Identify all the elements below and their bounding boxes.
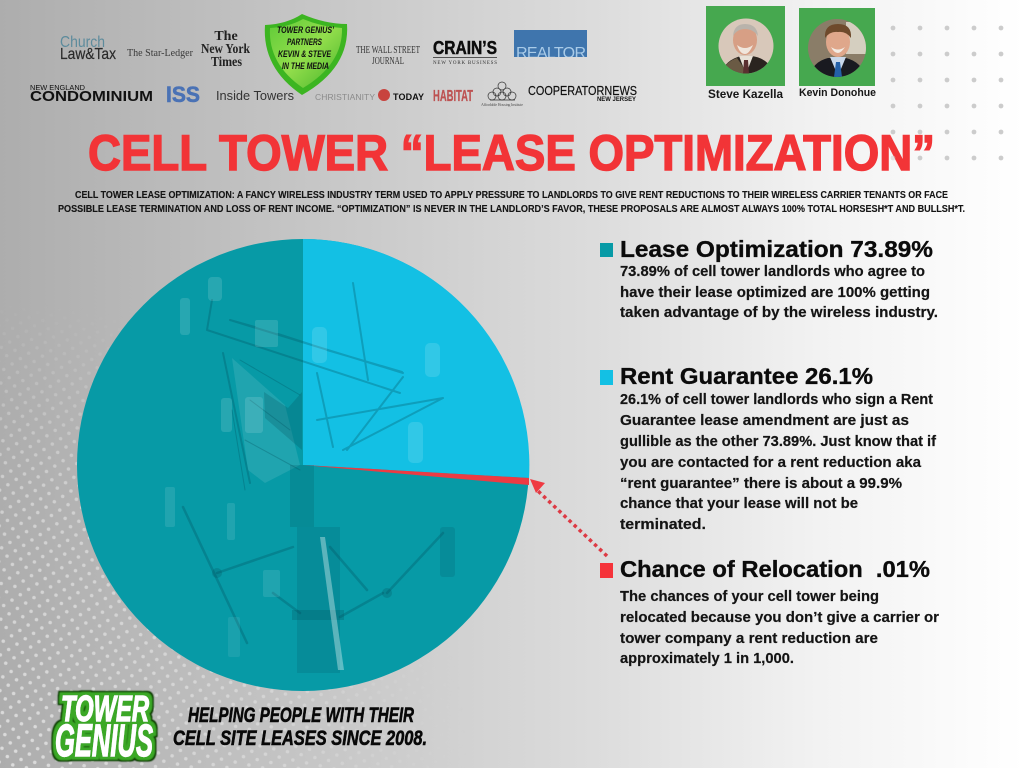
text block: rent guarantee description: you are contacted for a rent reduction aka bbox=[620, 455, 922, 471]
logo: New England Condominium: CONDOMINIUM bbox=[30, 88, 153, 105]
text block: chance of relocation description: relocated because you don’t give a carrier or bbox=[620, 610, 939, 626]
logo: Realtor bbox=[514, 30, 587, 57]
logo: The New York Times: Times bbox=[211, 55, 242, 70]
logo: Crain's bbox=[433, 38, 497, 66]
text block: lease optimization description bbox=[620, 264, 938, 321]
logo: Christianity Today bbox=[315, 89, 424, 102]
text block: chance of relocation description bbox=[620, 589, 939, 667]
logo: Habitat: HABITAT bbox=[433, 88, 473, 105]
heading: chance of relocation: Chance of Relocation .01% bbox=[620, 556, 930, 582]
logo: The Wall Street Journal: THE WALL STREET bbox=[356, 44, 420, 56]
portrait: Steve Kazella bbox=[706, 6, 785, 86]
logo: New England Condominium bbox=[30, 83, 153, 105]
panel: media logos bbox=[30, 29, 637, 107]
logo: Tower Genius bbox=[55, 688, 153, 766]
logo: Crain's: NEW YORK BUSINESS bbox=[433, 61, 497, 66]
logo: The New York Times: The bbox=[214, 29, 238, 44]
icon: media shield bbox=[265, 14, 347, 95]
logo: The Wall Street Journal: JOURNAL bbox=[372, 55, 404, 67]
legend item: chance of relocation bbox=[600, 556, 939, 667]
pie chart: lease outcomes bbox=[77, 239, 529, 691]
tagline: CELL SITE LEASES SINCE 2008. bbox=[173, 727, 427, 750]
logo: Christianity Today: TODAY bbox=[393, 92, 424, 102]
text block: rent guarantee description: “rent guarantee” there is about a 99.9% bbox=[620, 476, 902, 492]
text block: rent guarantee description: gullible as the other 73.89%. Just know that if bbox=[620, 434, 936, 450]
logo: The New York Times bbox=[201, 29, 250, 70]
legend swatch: teal bbox=[600, 243, 613, 257]
logo: The Wall Street Journal bbox=[356, 44, 420, 67]
legend swatch: red bbox=[600, 563, 613, 578]
text block: rent guarantee description: chance that your lease will not be bbox=[620, 496, 858, 512]
text block: rent guarantee description: terminated. bbox=[620, 517, 706, 533]
tagline bbox=[173, 704, 427, 750]
logo: Tower Genius: TOWER bbox=[61, 688, 149, 729]
text block: lease optimization description: taken advantage of by the wireless industry. bbox=[620, 305, 938, 321]
logo: ISS: ISS bbox=[166, 82, 200, 107]
logo: Cooperator News New Jersey bbox=[528, 84, 637, 103]
logo: Christianity Today: CHRISTIANITY bbox=[315, 92, 375, 102]
pie slice: rent guarantee 26.1% bbox=[303, 239, 529, 478]
logo: Cooperator News New Jersey: NEW JERSEY bbox=[597, 96, 637, 103]
text block: lease optimization description: have their lease optimized are 100% getting bbox=[620, 285, 930, 301]
portrait: Kevin Donohue bbox=[799, 8, 875, 86]
logo: Inside Towers: Inside Towers bbox=[216, 88, 294, 103]
arrow: relocation pointer bbox=[530, 479, 607, 556]
text block: chance of relocation description: The chances of your cell tower being bbox=[620, 589, 879, 605]
logo: Affordable Housing Institute: Affordable Housing Institute bbox=[481, 102, 523, 107]
heading: lease optimization: Lease Optimization 73.89% bbox=[620, 236, 933, 262]
icon: media shield: KEVIN & STEVE bbox=[278, 49, 331, 60]
legend swatch: light blue bbox=[600, 370, 613, 385]
logo: The New York Times: New York bbox=[201, 42, 250, 57]
name: Steve Kazella: Steve Kazella bbox=[708, 89, 784, 101]
title: CELL TOWER “LEASE OPTIMIZATION” bbox=[88, 125, 935, 181]
logo: Cooperator News New Jersey: COOPERATORNEWS bbox=[528, 84, 637, 98]
text block: chance of relocation description: tower company a rent reduction are bbox=[620, 631, 878, 647]
text block: definition bbox=[58, 189, 965, 215]
logo: Crain's: CRAIN’S bbox=[433, 38, 497, 58]
name: Kevin Donohue: Kevin Donohue bbox=[799, 87, 876, 99]
logo: Realtor: REALTOR bbox=[516, 45, 586, 62]
logo: Tower Genius: GENIUS bbox=[55, 715, 153, 766]
text block: rent guarantee description: Guarantee lease amendment are just as bbox=[620, 413, 909, 429]
logo: Church Law & Tax: Law&Tax bbox=[60, 46, 116, 63]
text block: chance of relocation description: approximately 1 in 1,000. bbox=[620, 651, 794, 667]
icon: media shield: TOWER GENIUS’ bbox=[277, 25, 334, 36]
icon: media shield: PARTNERS bbox=[287, 37, 322, 48]
logo: Church Law & Tax: Church bbox=[60, 34, 105, 51]
heading: rent guarantee: Rent Guarantee 26.1% bbox=[620, 363, 873, 389]
photo: cell tower overlay bbox=[165, 277, 455, 673]
lattice panel bbox=[232, 358, 300, 483]
logo: The Star-Ledger: The Star-Ledger bbox=[127, 47, 193, 59]
icon: media shield: IN THE MEDIA bbox=[282, 61, 329, 72]
pie slice: chance of relocation .01% bbox=[303, 465, 529, 485]
logo: Church Law & Tax bbox=[60, 34, 116, 63]
text block: rent guarantee description: 26.1% of cell tower landlords who sign a Rent bbox=[620, 392, 933, 408]
text block: rent guarantee description bbox=[620, 392, 936, 533]
tagline: HELPING PEOPLE WITH THEIR bbox=[188, 704, 415, 727]
text block: lease optimization description: 73.89% of cell tower landlords who agree to bbox=[620, 264, 925, 280]
logo: Affordable Housing Institute bbox=[481, 82, 523, 107]
legend item: lease optimization bbox=[600, 236, 938, 321]
logo: New England Condominium: NEW ENGLAND bbox=[30, 83, 86, 92]
legend item: rent guarantee bbox=[600, 363, 936, 533]
